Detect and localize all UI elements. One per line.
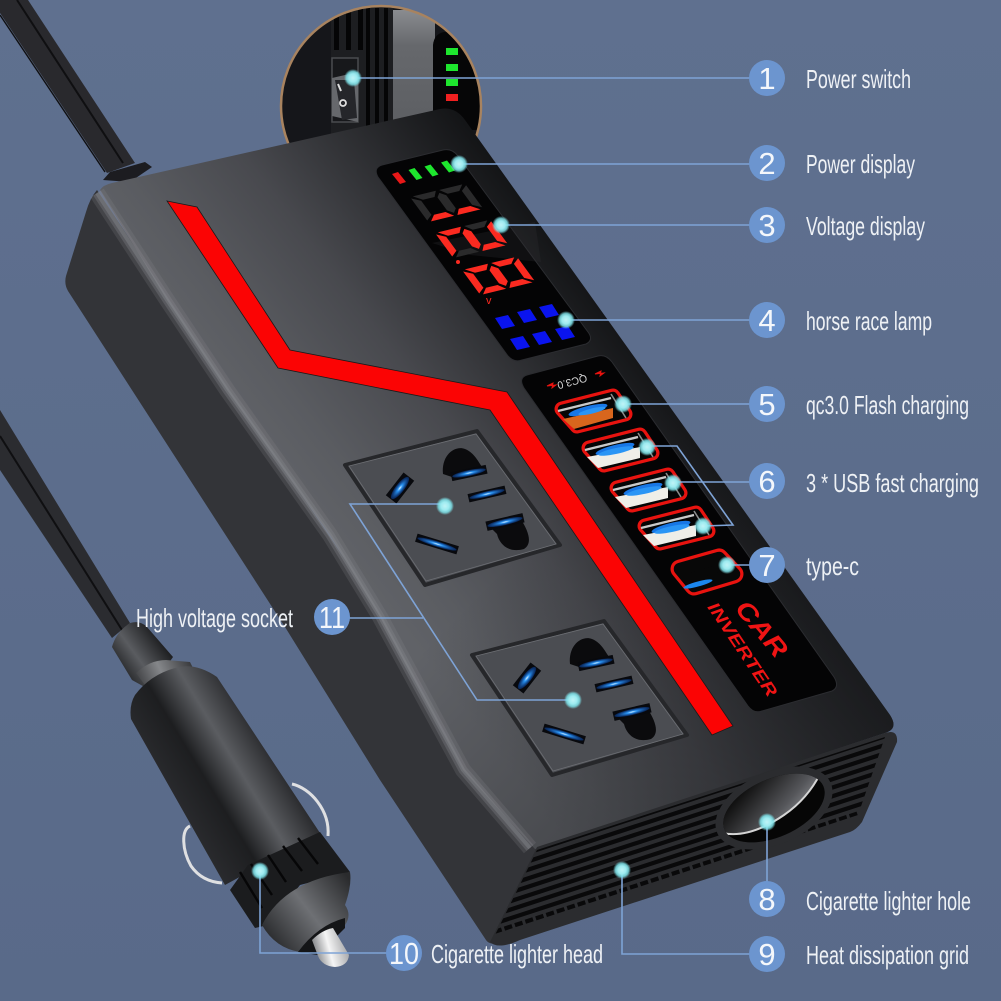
label 9: heat dissipation grid [749, 936, 969, 972]
leader 9 [613, 861, 750, 954]
socket 2 [472, 621, 687, 775]
label 5: qc3.0 flash charging [749, 386, 969, 422]
plug cone [262, 872, 350, 952]
label 3: voltage display [749, 207, 925, 243]
leader 7 [718, 556, 750, 574]
label 6: usb fast charging: 6 [758, 464, 776, 499]
leader 6 [638, 438, 750, 535]
cigarette lighter plug [112, 622, 350, 967]
seven segment digits: v [486, 295, 492, 307]
type-c port [680, 558, 734, 590]
label 3: voltage display: Voltage display [806, 211, 925, 241]
cigarette lighter hole [716, 766, 832, 850]
label 2: power display: Power display [806, 149, 915, 179]
label 2: power display [749, 145, 915, 181]
side face [65, 190, 540, 944]
label 7: type-c [749, 547, 859, 583]
label 4: horse race lamp [749, 302, 932, 338]
label 1: power switch [749, 60, 911, 96]
lower plug cable [0, 410, 130, 638]
leader 8 [758, 813, 776, 882]
USB panel [522, 356, 837, 712]
label 8: cigarette lighter hole [749, 881, 971, 917]
plug side springs [184, 784, 328, 883]
top face lower shading [100, 108, 894, 849]
leader 4 [557, 311, 750, 329]
inset battery indicators [446, 48, 458, 101]
leader 1 [344, 69, 750, 87]
plug barrel [130, 666, 320, 885]
inverter body [65, 108, 897, 946]
side edge highlight [97, 193, 530, 848]
power indicator bars [392, 160, 455, 184]
knurled ring [230, 832, 350, 928]
brand text: CAR [729, 595, 793, 663]
label 6: usb fast charging [749, 463, 979, 499]
label 10: cigarette lighter head: Cigarette lighter head [431, 939, 603, 969]
QC3.0 mark: QC3.0 [556, 371, 588, 391]
leader 11 [332, 497, 582, 709]
label 4: horse race lamp: horse race lamp [806, 306, 932, 336]
brand text [704, 595, 793, 701]
label 8: cigarette lighter hole: 8 [758, 882, 776, 917]
leader 5 [614, 395, 750, 413]
red accent stripe [167, 201, 733, 735]
label 7: type-c: type-c [806, 551, 859, 581]
inset: rocker switch close-up [280, 4, 482, 144]
leader 3 [492, 216, 750, 234]
seven segment digits [410, 184, 535, 307]
label 11: high voltage socket: High voltage socket [136, 603, 294, 633]
label 10: cigarette lighter head: 10 [389, 936, 419, 971]
front face with ventilation grid [490, 732, 897, 946]
label 11: high voltage socket: 11 [319, 600, 345, 635]
leader 2 [450, 155, 750, 173]
label 9: heat dissipation grid: 9 [758, 937, 776, 972]
plug metal tip [312, 928, 349, 967]
label 4: horse race lamp: 4 [758, 303, 776, 338]
horse race lamps [495, 304, 575, 350]
label 2: power display: 2 [758, 146, 776, 181]
QC3.0 port [558, 394, 626, 429]
USB ports [585, 433, 709, 546]
display panel [376, 150, 591, 361]
label 3: voltage display: 3 [758, 208, 776, 243]
rocker switch [332, 58, 358, 122]
label 1: power switch: Power switch [806, 64, 911, 94]
label 5: qc3.0 flash charging: 5 [758, 387, 776, 422]
leader 10 [251, 862, 387, 953]
label 1: power switch: 1 [758, 61, 776, 96]
brand text: INVERTER [704, 599, 781, 701]
label 7: type-c: 7 [758, 548, 776, 583]
top face [100, 108, 894, 849]
label 10: cigarette lighter head [386, 935, 603, 971]
socket 1 [345, 431, 560, 585]
top power cable [0, 0, 152, 182]
